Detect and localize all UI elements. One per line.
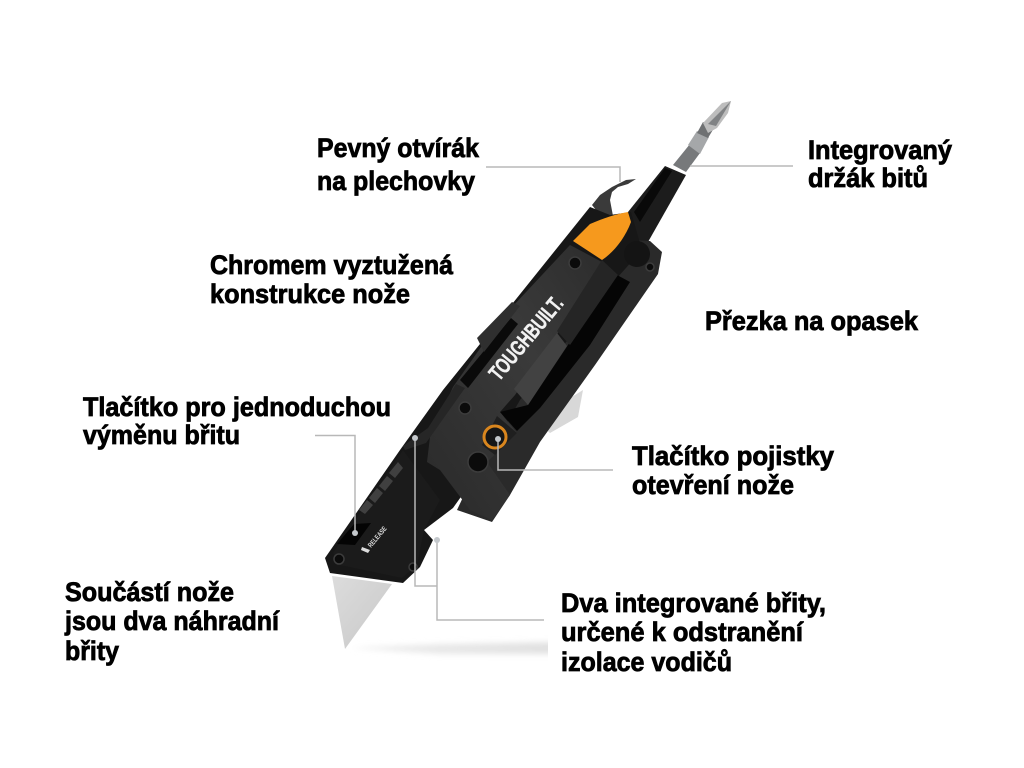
grey strip (514, 333, 567, 405)
black slot beside logo (460, 318, 518, 388)
label: blade change button: Tlačítko pro jednoduchou (83, 392, 391, 422)
label: chrome frame (210, 250, 454, 309)
label: chrome frame: konstrukce nože (210, 279, 410, 309)
black channel in clip (500, 275, 630, 431)
label: belt clip: Přezka na opasek (705, 306, 919, 336)
bit holder (615, 166, 686, 265)
label: bit holder (808, 135, 952, 193)
label: wire strippers: určené k odstranění (561, 617, 804, 647)
leader line: can opener (486, 167, 620, 182)
leader line: spare blades (412, 435, 437, 586)
collar (624, 241, 650, 267)
label: chrome frame: Chromem vyztužená (210, 250, 454, 280)
floor shadow (350, 642, 560, 654)
leader line: wire strippers (434, 537, 544, 620)
blade release slot (337, 523, 371, 545)
label: spare blades: břity (65, 636, 119, 666)
brand logo: TOUGHBUILT. (484, 291, 568, 385)
grip teeth (359, 462, 403, 514)
label: blade change button (83, 392, 391, 450)
can opener hook (592, 179, 636, 222)
lock plate (482, 416, 517, 455)
label: wire strippers: Dva integrované břity, (561, 588, 826, 618)
leader line: blade change button (315, 436, 358, 536)
label: spare blades: jsou dva náhradní (64, 606, 280, 636)
label: bit holder: držák bitů (808, 163, 928, 193)
label: can opener: na plechovky (317, 166, 475, 196)
label: spare blades (64, 577, 280, 666)
knife illustration (325, 101, 731, 654)
side rail (403, 384, 465, 450)
main blade (332, 576, 392, 649)
textured body panel (427, 245, 602, 520)
screws (334, 257, 654, 571)
lock button ring (484, 426, 506, 448)
main body silhouette (325, 207, 642, 583)
label: can opener (317, 133, 480, 196)
spare blade behind handle (535, 390, 583, 433)
label: spare blades: Součástí nože (65, 577, 234, 607)
orange latch (573, 212, 631, 260)
front head (333, 450, 440, 578)
leader line: bit holder (690, 165, 793, 167)
label: can opener: Pevný otvírák (317, 133, 480, 163)
release label: RELEASE (367, 525, 389, 549)
upper grip block (557, 260, 618, 345)
label: wire strippers (561, 588, 826, 677)
label: lock button: otevření nože (632, 470, 794, 500)
label: bit holder: Integrovaný (808, 135, 952, 165)
belt clip (457, 240, 662, 522)
side slide button (477, 302, 520, 352)
label: lock button (632, 441, 834, 500)
label: blade change button: výměnu břitu (83, 420, 240, 450)
label: lock button: Tlačítko pojistky (632, 441, 834, 471)
label: wire strippers: izolace vodičů (561, 647, 732, 677)
leader line: lock button (495, 436, 613, 470)
screwdriver bit (673, 101, 731, 172)
